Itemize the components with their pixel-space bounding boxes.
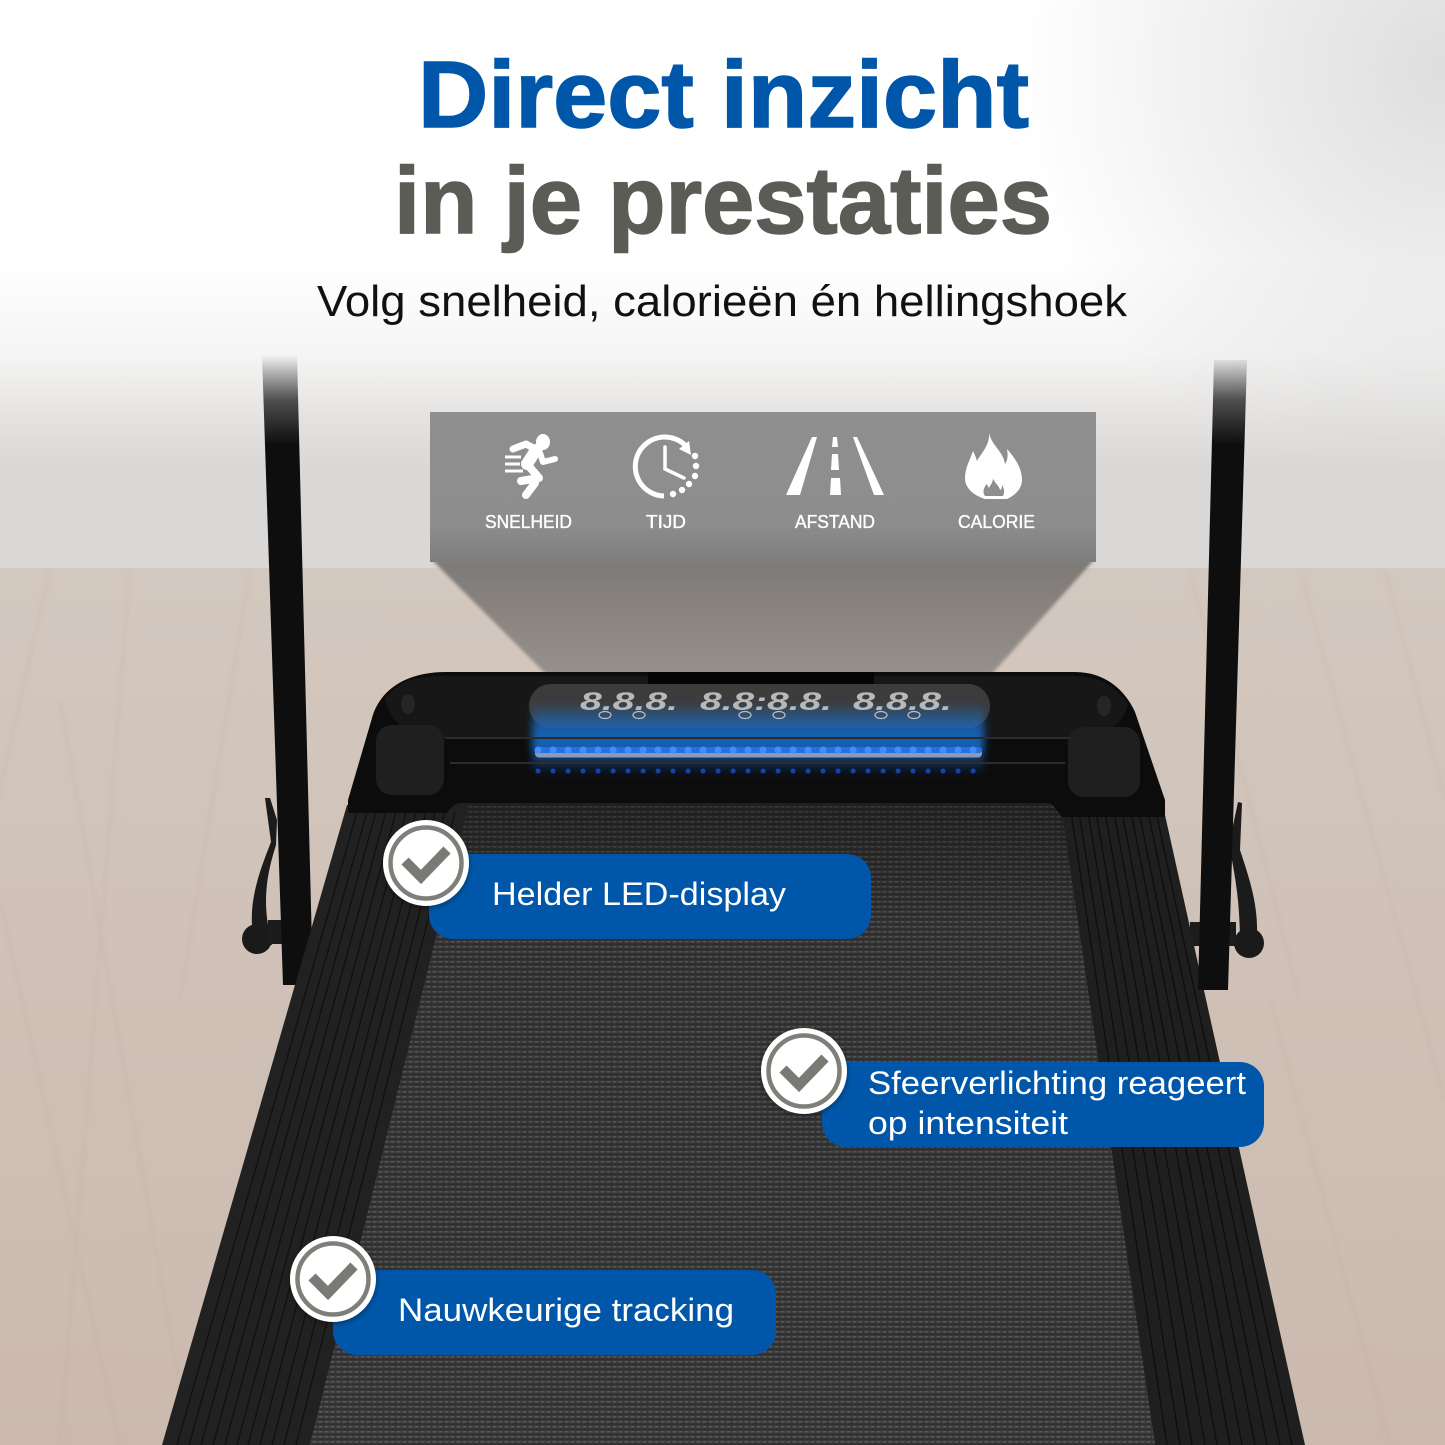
icon: clock (635, 437, 699, 497)
display indicators (599, 712, 920, 718)
subtitle: Volg snelheid, calorieën én hellingshoek (317, 277, 1128, 326)
icon: runner (505, 434, 555, 495)
right upright pole (1198, 360, 1247, 990)
divider lines (445, 738, 1070, 763)
icon: road (786, 437, 884, 495)
treadmill deck (162, 800, 1305, 1445)
running belt (310, 800, 1155, 1445)
display digits middle: 8.8:8.8. (700, 688, 832, 716)
icon: flame (965, 433, 1022, 499)
callout: ambient lighting: op intensiteit (868, 1105, 1068, 1141)
callout: tracking (290, 1236, 776, 1355)
icon panel (430, 412, 1096, 562)
console body (348, 672, 1165, 817)
callout: tracking: Nauwkeurige tracking (398, 1292, 734, 1328)
title line 1: Direct inzicht (418, 42, 1029, 148)
console recess (648, 672, 874, 686)
white fade overlay (0, 0, 1445, 470)
left folding lever (242, 798, 284, 954)
display panel (529, 684, 990, 728)
callout: ambient lighting (761, 1028, 1264, 1147)
blue glow (532, 702, 984, 776)
LED reflection (538, 768, 980, 774)
left side rail (162, 800, 475, 1445)
right side rail (1055, 805, 1305, 1445)
callout: LED display (383, 820, 871, 939)
label: afstand: AFSTAND (795, 512, 875, 532)
projection cone under panel (432, 560, 1094, 676)
title line 2: in je prestaties (394, 148, 1052, 254)
right folding lever (1190, 802, 1264, 958)
background: wall (0, 0, 1445, 570)
left upright pole (262, 355, 313, 985)
display digits left: 8.8.8. (580, 688, 678, 716)
label: calorie: CALORIE (958, 512, 1035, 532)
console top lobe (385, 676, 1128, 738)
right pod (1068, 727, 1140, 797)
callout: ambient lighting: Sfeerverlichting reageert (868, 1065, 1246, 1101)
label: snelheid: SNELHEID (485, 512, 572, 532)
display digits right: 8.8.8. (853, 688, 952, 716)
left pod (376, 725, 444, 795)
LED strip (535, 747, 982, 758)
treadmill console (348, 672, 1165, 817)
background: wooden floor (0, 568, 1445, 1445)
callout: LED display: Helder LED-display (492, 876, 786, 912)
speaker grilles (401, 694, 1111, 716)
label: tijd: TIJD (646, 512, 686, 532)
grey corner shading (900, 0, 1445, 500)
